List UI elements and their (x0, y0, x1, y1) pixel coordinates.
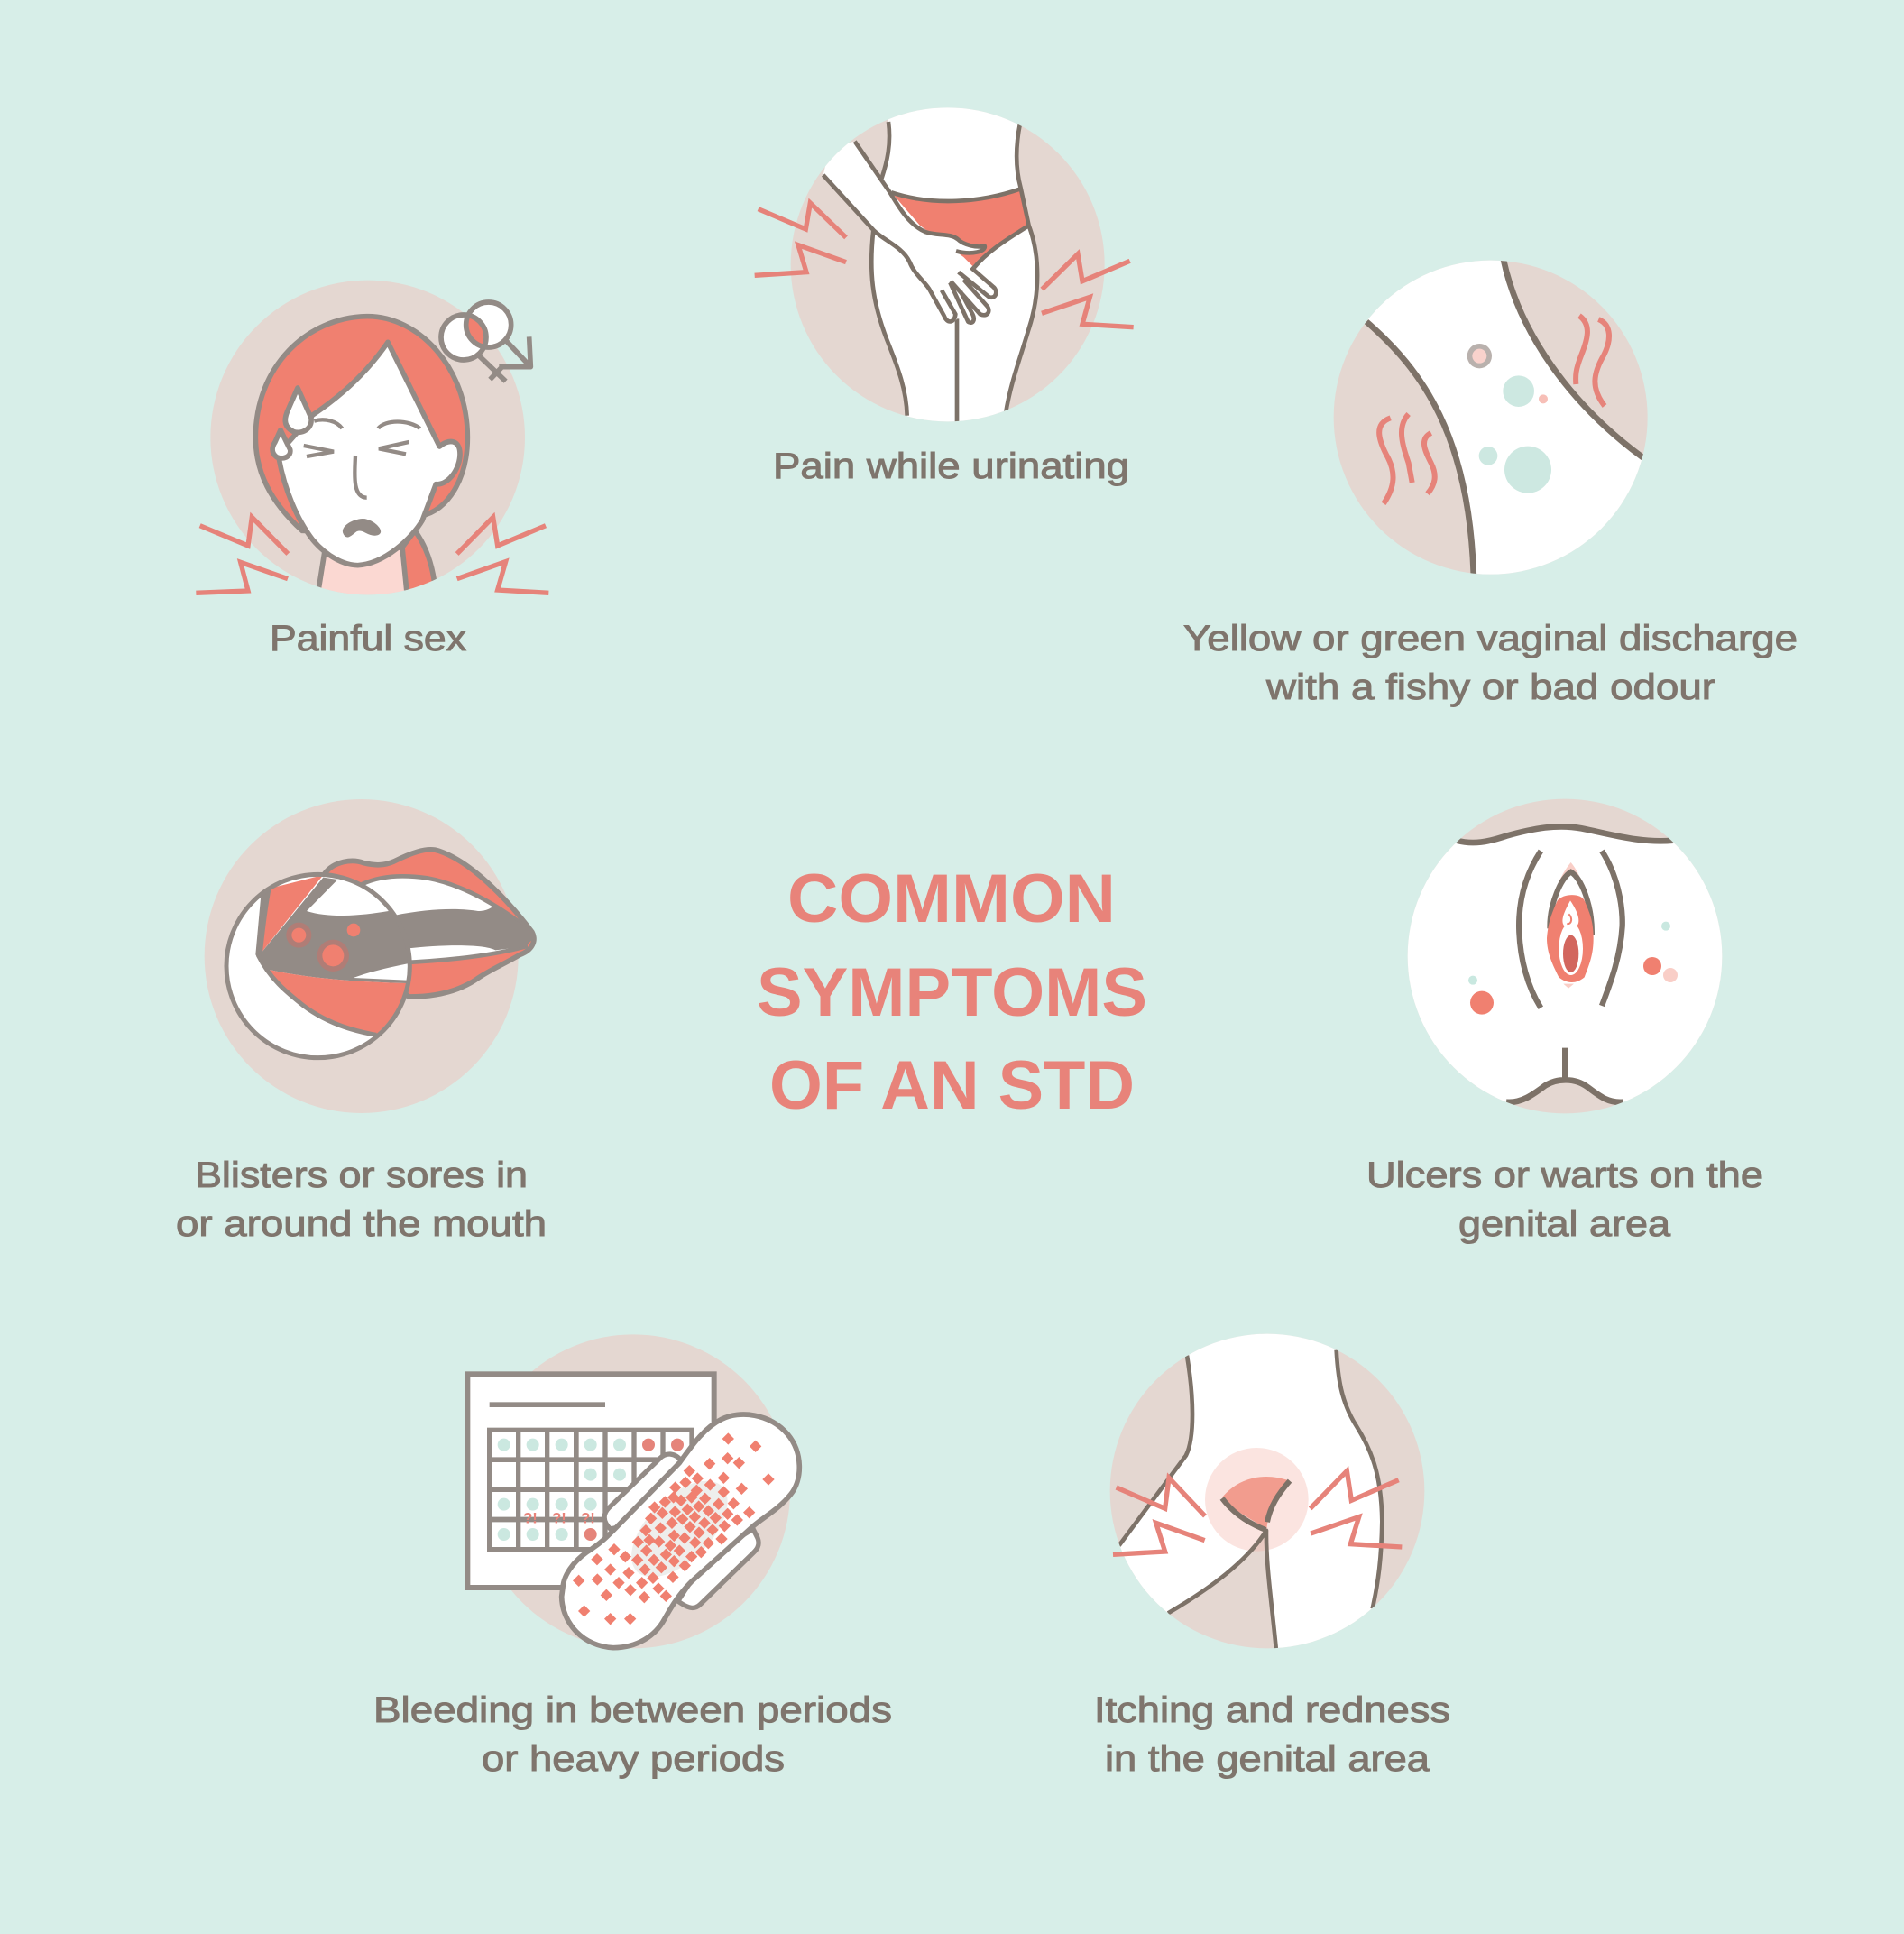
caption: vaginal discharge (1183, 619, 1798, 707)
pad wings (604, 1454, 759, 1607)
sores (286, 923, 360, 972)
icon: sweat drops (272, 388, 311, 458)
icon: gender symbols (441, 302, 530, 382)
title: SYMPTOMS (757, 954, 1147, 1031)
caption: mouth sores (176, 1156, 547, 1244)
caption: vaginal discharge: Yellow or green vaginal discharge (1183, 619, 1798, 658)
caption: genital ulcers: Ulcers or warts on the (1366, 1156, 1763, 1195)
caption: mouth sores: Blisters or sores in (195, 1156, 528, 1195)
calendar: ?! (552, 1510, 566, 1527)
panel: mouth sores (176, 799, 547, 1244)
panel: vaginal discharge (1183, 244, 1798, 707)
calendar (467, 1374, 714, 1588)
panel: pain while urinating (755, 102, 1134, 486)
caption: painful sex: Painful sex (270, 619, 466, 658)
calendar: ?! (581, 1510, 595, 1527)
panel: itching and redness (1091, 1329, 1450, 1779)
icon: discharge and odour (1333, 260, 1647, 575)
caption: pain while urinating: Pain while urinating (773, 447, 1129, 486)
caption: mouth sores: or around the mouth (176, 1204, 547, 1244)
icon: groin with irritated area (1109, 1333, 1425, 1649)
icon: pained woman's face (196, 281, 548, 598)
icon: pelvis with hand and pain bolts (755, 102, 1134, 427)
caption: itching and redness: in the genital area (1105, 1739, 1430, 1779)
panel: genital ulcers (1366, 799, 1763, 1244)
icon: vulva with warts (1407, 799, 1723, 1113)
icon: calendar and sanitary pad (467, 1334, 799, 1648)
icon: lips with magnified sores (205, 799, 534, 1113)
panel: bleeding between periods (373, 1334, 892, 1779)
title: OF AN STD (769, 1047, 1135, 1124)
caption: bleeding between periods: or heavy periods (482, 1739, 785, 1779)
caption: genital ulcers (1366, 1156, 1763, 1244)
caption: bleeding between periods: Bleeding in between periods (373, 1690, 892, 1730)
caption: bleeding between periods (373, 1690, 892, 1779)
title: COMMON (787, 861, 1116, 937)
pad body (562, 1414, 799, 1648)
caption: itching and redness (1094, 1690, 1450, 1779)
caption: vaginal discharge: with a fishy or bad odour (1265, 668, 1715, 707)
title (757, 861, 1147, 1124)
caption: genital ulcers: genital area (1458, 1204, 1671, 1244)
caption: itching and redness: Itching and redness (1094, 1690, 1450, 1730)
panel: painful sex (196, 281, 548, 658)
blood spots (573, 1432, 775, 1625)
calendar: ?! (523, 1510, 538, 1527)
